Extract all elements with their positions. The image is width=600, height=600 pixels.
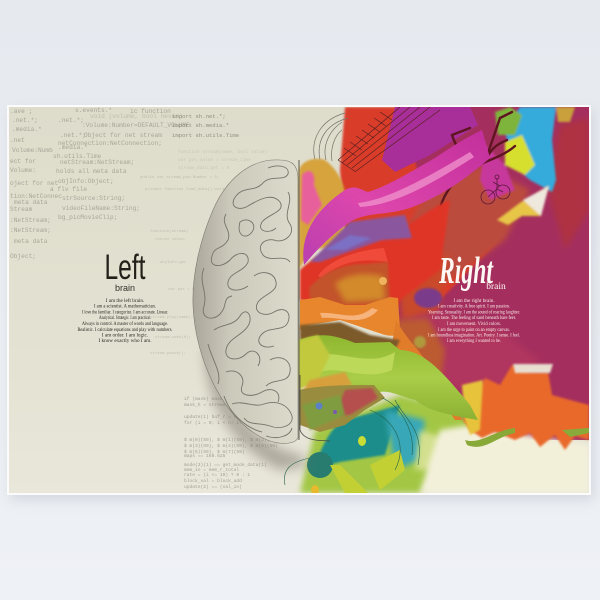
code text: top left: :Volume:Number=DEFAULT_VOLUME <box>82 122 190 129</box>
pink swoosh <box>303 130 490 265</box>
code text: top left: .net.*; <box>12 117 38 124</box>
code text: top left: videoFileName:String; <box>62 205 140 212</box>
code text: top left: Stream <box>10 206 33 213</box>
poster artwork <box>9 107 590 495</box>
faint code: left and centre: stream.seek(0); <box>155 335 191 340</box>
code text: lower left: mem_in = mem_r_total <box>184 467 239 473</box>
code text: top left: .net <box>10 137 25 144</box>
code text: lower left: block_val = block_add <box>184 478 242 484</box>
code text: top left: holds all meta data <box>56 168 127 175</box>
code text: lower left: if (mask) mask_r = mask_val; <box>184 396 261 402</box>
code text: lower left <box>184 396 278 490</box>
code text: top centre: import sh.utils.Time <box>172 132 239 139</box>
dark contour lines: lower right of brain <box>284 398 419 485</box>
text block: right brain: I am taste. The feeling of sand beneath bare feet. <box>432 314 516 321</box>
code text: top centre: import sh.net.*; <box>172 113 226 120</box>
faint code: left and centre: stream.pause(); <box>150 351 186 356</box>
heading: Right: Right <box>438 250 494 292</box>
code text: top left: Volume:Numb <box>12 147 53 154</box>
green lobe <box>299 335 478 420</box>
icon: bicycle rider <box>481 175 510 204</box>
code text: lower left: $ m(6)(59), $ m(7)(59) <box>184 449 245 455</box>
code text: lower left: $ m(0)(59), $ m(1)(59), $ m(2)(59) <box>184 437 278 443</box>
code text: top left: .net.*; <box>58 117 84 124</box>
code text: top left: strSource:String; <box>62 195 125 202</box>
code text: top left: Object for net stream <box>84 132 162 139</box>
code text: top left: :NetStream; <box>10 217 51 224</box>
code text: top left: netStream:NetStream; <box>60 159 134 166</box>
text block: right brain: I am creativity. A free spirit. I am passion. <box>438 302 510 310</box>
lower multicolour lobe <box>299 385 385 432</box>
upper yellow and pink lobe <box>299 159 345 270</box>
heading: Right <box>439 256 506 291</box>
text block: right brain: I am boundless imagination. Art. Poetry. I sense. I feel. <box>428 332 520 338</box>
code text: top left: ic function <box>130 108 171 115</box>
brain: left hemisphere <box>193 160 298 443</box>
text block: left brain: I am the left brain. <box>106 297 144 304</box>
left hemisphere shadow <box>205 350 310 470</box>
code text: top left: sh.utils.Time <box>53 153 102 160</box>
code text: lower left: update(2) == (val_in) <box>184 484 242 490</box>
code text: lower left: maps == 168.625 <box>184 453 226 459</box>
code text: top centre <box>172 113 267 171</box>
text block: left brain: Realistic. I calculate equations and play with numbers. <box>78 327 172 333</box>
code text: top left: oject for net <box>10 180 59 187</box>
code text: top left <box>10 107 190 260</box>
text block: right brain: I am the urge to paint on an empty canvas. <box>438 327 510 333</box>
code text: top left: s.events.* <box>75 107 112 114</box>
code text: top left: bg_picMovieClip; <box>58 214 117 221</box>
code text: top left: meta data <box>14 238 48 245</box>
central violet lobe <box>310 215 412 262</box>
faint code: left and centre: stream.play(name); <box>150 315 193 320</box>
code text: top left: objInfo:Object; <box>58 178 114 185</box>
code text: top left: tion:NetConnec <box>10 193 62 200</box>
code text: top left: .media.* <box>58 144 88 151</box>
faint code: left and centre: objInfo.get <box>160 260 186 265</box>
faint code: left and centre <box>140 175 225 356</box>
paint: blue, yellow and green splash <box>480 107 575 225</box>
code text: top left: .media.* <box>12 126 42 133</box>
text block: left brain: Analytical. Strategic. I am practical. <box>99 315 151 321</box>
heading: Left: Left <box>104 248 146 287</box>
paint: right side field <box>340 107 590 440</box>
paint: lower right orange splash <box>420 364 589 493</box>
text block: right brain: I am movement. Vivid colors. <box>447 321 501 327</box>
text block: left brain: I am order. I am logic. <box>102 332 148 338</box>
dark tree branches <box>440 110 516 206</box>
text block: left brain: Always in control. A master of words and language. <box>82 320 168 327</box>
code text: lower left: for (i = 0; i < n; i++) <box>184 420 247 426</box>
code text: top centre: import sh.media.* <box>172 122 229 129</box>
faint code: left and centre: return value; <box>155 237 186 242</box>
code text: top left: Object; <box>10 253 36 260</box>
text block: right brain <box>428 298 520 344</box>
code text: top left: Volume: <box>10 167 36 174</box>
faint code: left and centre: var pos = 0; <box>168 287 197 292</box>
code text: lower left: update(1) buf_r = val; <box>184 414 245 420</box>
orange lobe <box>300 297 400 336</box>
code text: top centre: stream_data.get = 0 <box>178 165 230 171</box>
text block: right brain: I am the right brain. <box>453 298 495 304</box>
code text: lower left: mode(3)(1) == get_mode_data(1) <box>184 462 267 468</box>
code text: top centre: var pos_value = stream_time <box>178 157 251 163</box>
text block: left brain <box>78 297 172 344</box>
code text: top left: .net.*; <box>60 132 86 139</box>
code text: lower left: rate = (i <= 10) ? 0 : 1 <box>184 472 250 478</box>
text block: left brain: I love the familiar. I categorize. I am accurate. Linear. <box>82 308 168 316</box>
heading: Left <box>106 254 146 291</box>
poster frame <box>7 105 594 500</box>
faint code: left and centre: function(stream) <box>150 229 188 234</box>
heading: Right: brain <box>486 282 506 292</box>
code text: top centre: function stream(name, bool value) <box>178 149 267 155</box>
code text: top left: .ave ; <box>10 108 32 115</box>
text block: right brain: Yearning. Sensuality. I am the sound of roaring laughter. <box>428 308 520 316</box>
code text: lower left: mask_h = stream_data <box>184 402 239 408</box>
hatched lines: top of brain <box>338 107 440 172</box>
heading: Left: brain <box>115 283 135 293</box>
text block: left brain: I know exactly who I am. <box>98 338 152 344</box>
code text: top left: meta data <box>14 199 48 206</box>
brain folds <box>202 166 292 438</box>
code text: top left: :NetStream; <box>10 227 51 234</box>
faint code: left and centre: public var stream_pos:Number = 0; <box>140 175 219 180</box>
code text: top left: a flv file <box>50 186 87 193</box>
text block: right brain: I am everything I wanted to be. <box>447 338 501 344</box>
code text: lower left: $ m(3)(59), $ m(4)(59), $ m(5)(59) <box>184 443 278 449</box>
faint code: left and centre: private function load_data():void <box>145 187 225 192</box>
code text: top left: netConnection:NetConnection; <box>58 140 162 147</box>
contour lines: above brain <box>314 113 348 161</box>
paint: bottom lime and teal <box>300 395 480 495</box>
paper background <box>9 107 589 493</box>
code text: top left: ect for <box>10 158 36 165</box>
code text: top left: void (volume, bool never) <box>90 113 183 120</box>
brain: right hemisphere <box>299 130 490 441</box>
text block: left brain: I am a scientist. A mathematician. <box>94 304 156 310</box>
red lobe <box>300 200 450 306</box>
